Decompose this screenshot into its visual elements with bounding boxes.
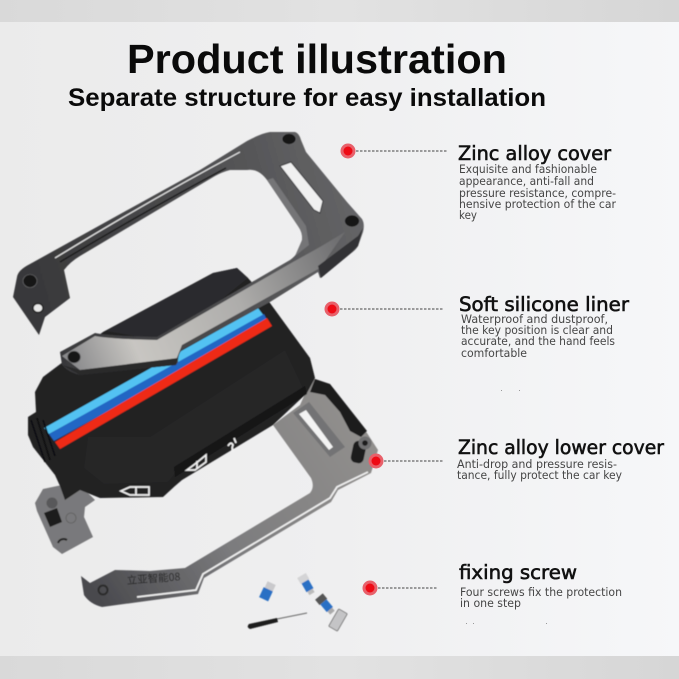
callout: zinc alloy cover bbox=[340, 142, 616, 222]
screw 2 bbox=[297, 573, 316, 596]
screwdriver bbox=[248, 613, 307, 629]
small specks bbox=[466, 390, 547, 624]
cover highlights bbox=[55, 152, 240, 258]
callout: soft silicone liner bbox=[324, 293, 630, 360]
screws bbox=[248, 573, 347, 631]
zinc alloy upper cover bbox=[13, 132, 364, 375]
subtitle: Separate structure for easy installation bbox=[68, 84, 546, 112]
callout: zinc alloy cover: key bbox=[459, 208, 477, 222]
callout: zinc alloy cover: Exquisite and fashionable bbox=[459, 162, 597, 176]
grip ridges bbox=[31, 418, 55, 462]
callout: zinc alloy cover: appearance, anti-fall and bbox=[459, 174, 594, 188]
callout: zinc alloy lower cover: Anti-drop and pressure resis- bbox=[457, 457, 617, 471]
callout: zinc alloy lower cover: tance, fully protect the car key bbox=[457, 468, 622, 482]
screw 3 bbox=[315, 593, 336, 616]
stripes: light blue, blue, red bbox=[44, 308, 272, 449]
cover screw holes bbox=[23, 134, 360, 363]
zinc alloy lower cover: left part bbox=[35, 485, 95, 554]
callout: zinc alloy cover: Zinc alloy cover bbox=[458, 142, 612, 165]
callout: soft silicone liner: accurate, and the hand feels bbox=[461, 334, 615, 348]
screw 1 bbox=[259, 581, 276, 601]
title: Product illustration bbox=[127, 36, 507, 82]
engraved text: 立亚智能08 bbox=[126, 569, 181, 588]
callout: soft silicone liner: the key position is clear and bbox=[461, 323, 613, 337]
callout: zinc alloy cover: hensive protection of the car bbox=[459, 197, 616, 211]
left mount post bbox=[44, 498, 76, 543]
callout: fixing screw: fixing screw bbox=[459, 561, 577, 584]
callout: fixing screw bbox=[362, 561, 622, 610]
button icons bbox=[121, 438, 236, 495]
top band bbox=[0, 0, 679, 22]
callout: zinc alloy lower cover: Zinc alloy lower cover bbox=[458, 436, 665, 459]
screw 4 bbox=[329, 609, 347, 631]
callout: fixing screw: Four screws fix the protection bbox=[460, 585, 622, 599]
bottom band bbox=[0, 656, 679, 679]
callout: soft silicone liner: Soft silicone liner bbox=[459, 293, 630, 316]
callout: fixing screw: in one step bbox=[460, 596, 521, 610]
callout: soft silicone liner: comfortable bbox=[461, 346, 527, 360]
callout: zinc alloy lower cover bbox=[368, 436, 665, 482]
zinc alloy lower cover: right part bbox=[81, 378, 378, 607]
callout: soft silicone liner: Waterproof and dustproof, bbox=[461, 312, 608, 326]
soft silicone liner bbox=[28, 268, 315, 500]
callout: zinc alloy cover: pressure resistance, compre- bbox=[459, 186, 616, 200]
cover slot bbox=[280, 162, 323, 213]
exploded product illustration bbox=[13, 132, 378, 631]
